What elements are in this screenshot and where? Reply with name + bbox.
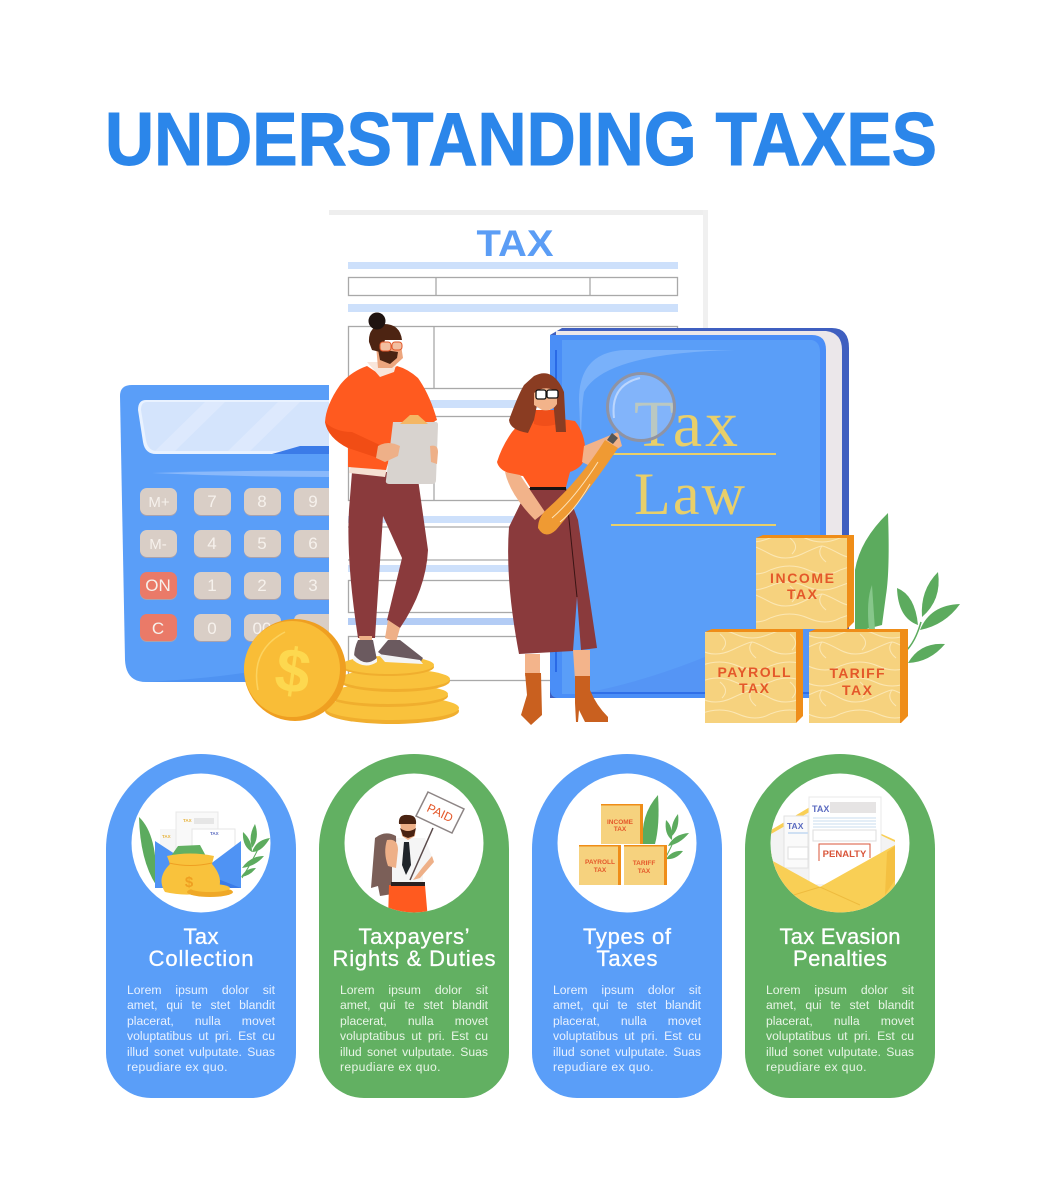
- calculator: 3: [308, 576, 318, 595]
- body text: amet, qui te stet blandit: [127, 998, 275, 1012]
- body text: repudiare ex quo.: [766, 1060, 867, 1074]
- calculator: 4: [207, 534, 217, 553]
- body text: Lorem ipsum dolor sit: [766, 983, 914, 997]
- body text: voluptatibus ut pri. Est cu: [127, 1029, 275, 1043]
- icon: penalty letter: TAX: [787, 821, 804, 831]
- penalty stamp: [819, 844, 870, 861]
- body text: repudiare ex quo.: [340, 1060, 441, 1074]
- heading: [583, 924, 672, 971]
- penalty stamp: PENALTY: [823, 849, 867, 860]
- law book: Law: [634, 461, 746, 527]
- icon: tax boxes: [558, 774, 696, 912]
- calculator: 1: [207, 576, 217, 595]
- panel: types of taxes: [532, 754, 722, 1098]
- calculator: 7: [207, 492, 217, 511]
- gold dollar coin: $: [271, 635, 315, 708]
- body text: illud sonet vulputate. Suas: [127, 1045, 275, 1059]
- heading: Taxes: [596, 946, 658, 971]
- clipboard: [386, 415, 438, 484]
- heading: [332, 924, 496, 971]
- calculator: C: [152, 619, 164, 638]
- heading: Types of: [583, 924, 672, 949]
- calculator: M+: [148, 494, 170, 511]
- heading: Taxpayers’: [358, 924, 470, 949]
- icon: tax boxes: INCOME: [607, 819, 634, 826]
- icon: tax boxes: TAX: [638, 868, 651, 875]
- law book: [550, 328, 849, 698]
- calculator: [120, 385, 329, 682]
- icon: tax boxes: TAX: [594, 867, 607, 874]
- body text: illud sonet vulputate. Suas: [553, 1045, 701, 1059]
- card background: [532, 754, 722, 1098]
- icon: money bag and envelope: TAX: [162, 834, 171, 839]
- calculator: M-: [149, 536, 167, 553]
- calculator: 9: [308, 492, 318, 511]
- calculator: 00: [253, 619, 271, 638]
- paid sign: [416, 792, 464, 833]
- box: income tax: [756, 535, 854, 629]
- body text: voluptatibus ut pri. Est cu: [766, 1029, 914, 1043]
- panel: taxpayers rights and duties: [319, 754, 509, 1098]
- heading: [148, 924, 254, 971]
- icon: money bag and envelope: TAX: [210, 831, 219, 836]
- body text: Lorem ipsum dolor sit: [553, 983, 701, 997]
- box: tariff tax: TARIFF: [830, 665, 885, 681]
- box: payroll tax: [705, 629, 803, 723]
- body text: amet, qui te stet blandit: [553, 998, 701, 1012]
- heading: Collection: [148, 946, 254, 971]
- icon: penalty letter: [770, 774, 910, 920]
- body text: repudiare ex quo.: [553, 1060, 654, 1074]
- body text: amet, qui te stet blandit: [340, 998, 488, 1012]
- box: tariff tax: [809, 629, 908, 723]
- body text: [127, 983, 275, 1074]
- body text: illud sonet vulputate. Suas: [766, 1045, 914, 1059]
- body text: [340, 983, 488, 1074]
- calculator: 0: [207, 619, 217, 638]
- calculator: 5: [257, 534, 267, 553]
- body text: [553, 983, 701, 1074]
- tax form document: TAX: [476, 223, 554, 264]
- paid sign: PAID: [425, 801, 456, 825]
- body text: repudiare ex quo.: [127, 1060, 228, 1074]
- body text: [766, 983, 914, 1074]
- body text: placerat, nulla movet: [766, 1014, 914, 1028]
- tax boxes: [705, 535, 908, 723]
- leaves: [855, 513, 960, 663]
- title: UNDERSTANDING TAXES: [105, 97, 937, 181]
- icon: man with paid sign: [344, 774, 484, 920]
- box: tariff tax: TAX: [842, 682, 873, 698]
- heading: Tax: [184, 924, 218, 949]
- icon: money bag and envelope: TAX: [183, 818, 192, 823]
- heading: Tax Evasion: [780, 924, 900, 949]
- woman with magnifying glass: [497, 373, 674, 725]
- heading: Penalties: [793, 946, 887, 971]
- magnifying glass: [538, 374, 674, 535]
- calculator: 6: [308, 534, 318, 553]
- box: payroll tax: TAX: [739, 680, 770, 696]
- icon: penalty letter: TAX: [812, 804, 829, 814]
- man with clipboard: [325, 312, 438, 666]
- icon: tax boxes: TAX: [614, 826, 627, 833]
- heading: [780, 924, 900, 971]
- box: income tax: TAX: [787, 586, 818, 602]
- icon: money bag and envelope: [132, 774, 270, 912]
- body text: Lorem ipsum dolor sit: [340, 983, 488, 997]
- icon: tax boxes: TARIFF: [633, 860, 655, 867]
- box: payroll tax: PAYROLL: [718, 664, 791, 680]
- body text: placerat, nulla movet: [127, 1014, 275, 1028]
- calculator: 8: [257, 492, 267, 511]
- calculator: ON: [145, 576, 171, 595]
- body text: voluptatibus ut pri. Est cu: [340, 1029, 488, 1043]
- main illustration: [120, 210, 960, 725]
- body text: amet, qui te stet blandit: [766, 998, 914, 1012]
- icon: money bag and envelope: $: [185, 874, 194, 891]
- box: income tax: INCOME: [770, 570, 834, 586]
- body text: placerat, nulla movet: [340, 1014, 488, 1028]
- panel: tax evasion penalties: [745, 754, 935, 1098]
- icon: tax boxes: PAYROLL: [585, 859, 615, 866]
- card background: [106, 754, 296, 1098]
- tax form document: [329, 210, 708, 685]
- body text: voluptatibus ut pri. Est cu: [553, 1029, 701, 1043]
- law book: Tax: [634, 388, 738, 461]
- coin stack: [325, 656, 459, 724]
- panel: tax collection: [106, 754, 296, 1098]
- hair: [509, 373, 566, 433]
- calculator: 2: [257, 576, 267, 595]
- heading: Rights & Duties: [332, 946, 496, 971]
- body text: illud sonet vulputate. Suas: [340, 1045, 488, 1059]
- card background: [319, 754, 509, 1098]
- body text: placerat, nulla movet: [553, 1014, 701, 1028]
- gold dollar coin: [244, 619, 346, 721]
- body text: Lorem ipsum dolor sit: [127, 983, 275, 997]
- card background: [745, 754, 935, 1098]
